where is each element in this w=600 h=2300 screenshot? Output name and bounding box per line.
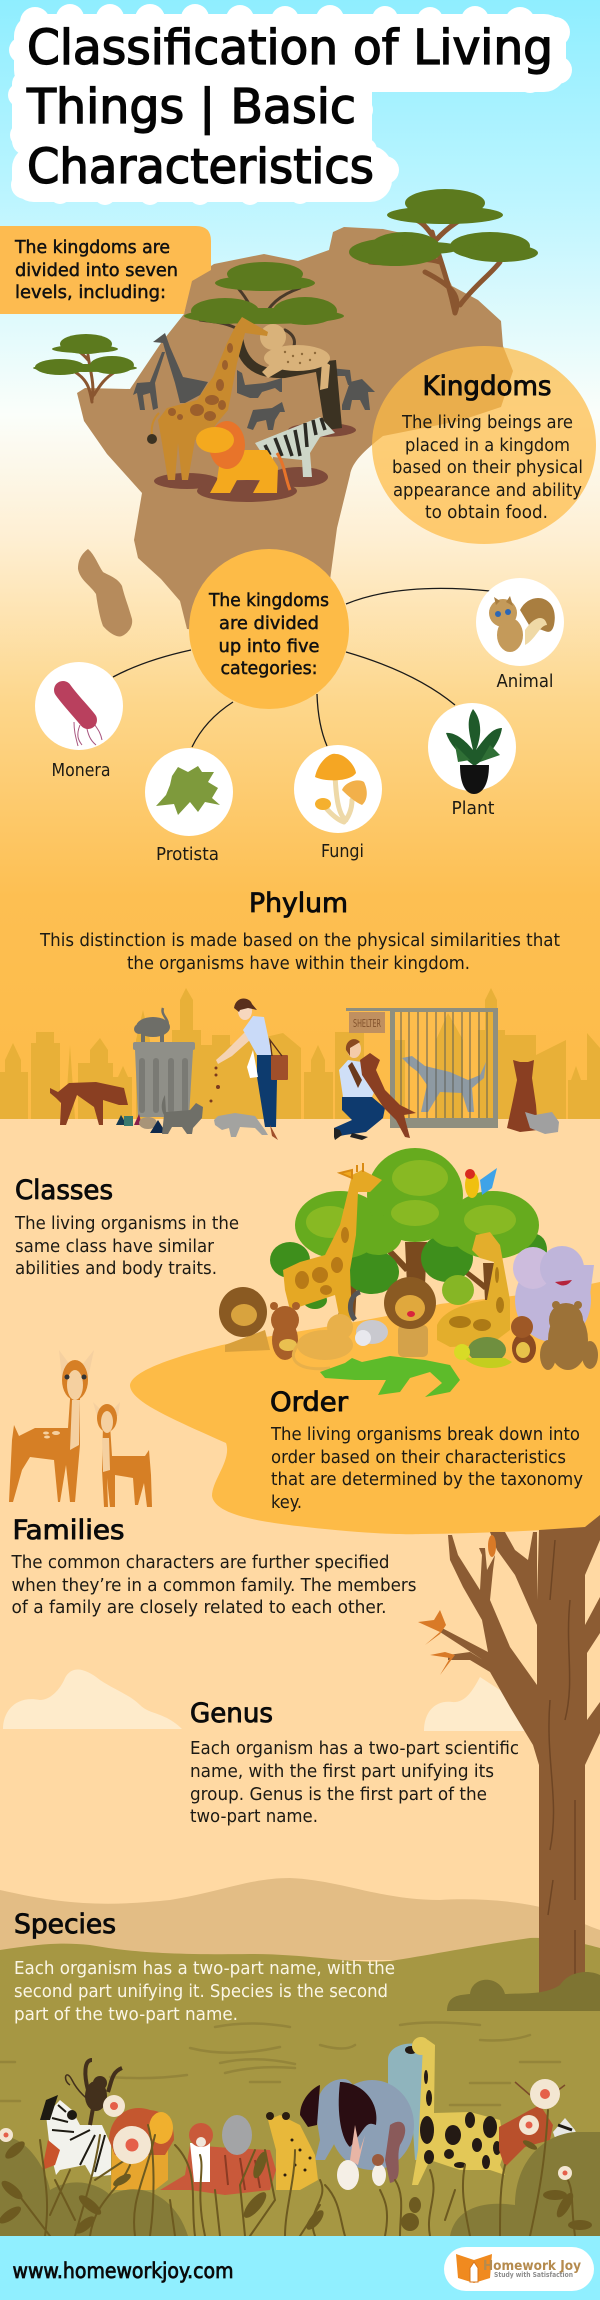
orange leaves: [418, 1535, 496, 1675]
logo: Homework Joy: Homework Joy: [483, 2259, 581, 2274]
background: sky to orange gradient: [0, 0, 600, 1120]
elephant: [513, 1246, 594, 1342]
illustration: man hugging dog: [334, 1039, 416, 1140]
crocodile: [320, 1356, 460, 1397]
rabbit: [337, 2125, 365, 2190]
callout: five categories circle: categories:: [220, 658, 318, 679]
text: Genus description: Each organism has a two-part scientific: [190, 1738, 519, 1759]
text: Kingdoms description: to obtain food.: [425, 502, 548, 523]
monkey: [511, 1316, 536, 1363]
reclining giraffe: [437, 1232, 510, 1347]
category: Protista: Protista: [156, 844, 219, 865]
small brown bear: [270, 1302, 300, 1360]
icon: open book: [456, 2254, 492, 2283]
text: Phylum description: [39, 930, 560, 974]
footer website text: www.homeworkjoy.com: [12, 2259, 234, 2283]
category: Protista: [145, 748, 233, 865]
text: Classes description: same class have similar: [15, 1236, 214, 1257]
title lines: Classification of Living: [27, 20, 553, 76]
footer band: [0, 2236, 600, 2300]
callout: five categories circle: are divided: [219, 613, 319, 634]
deer: [499, 2082, 565, 2167]
text: Order description: [270, 1424, 583, 1513]
foreground bushes: [0, 2132, 600, 2236]
callout: five categories circle: The kingdoms: [208, 590, 329, 611]
text: Kingdoms description: appearance and ability: [393, 480, 582, 501]
category: Animal: [476, 578, 564, 692]
heading: Order: Order: [270, 1387, 348, 1418]
text: Species description: second part unifying it. Species is the second: [14, 1981, 388, 2002]
callout: five categories circle: up into five: [218, 636, 320, 657]
giraffe: [147, 317, 268, 480]
text: Genus description: two-part name.: [190, 1806, 318, 1827]
elephant: [300, 2079, 414, 2183]
text: Classes description: The living organisms in the: [14, 1213, 239, 1234]
heading: Species: Species: [14, 1909, 116, 1940]
heading: Classes: Classes: [15, 1175, 113, 1206]
illustration: sitting dog and kitten: [507, 1060, 559, 1134]
central tree branches: [200, 285, 300, 358]
clouds: [3, 1670, 530, 1731]
category: Animal: Animal: [496, 671, 554, 692]
connector lines: [113, 588, 490, 747]
icon: bacterium: [63, 690, 102, 746]
icon: green protist: [156, 766, 220, 815]
text: Order description: key.: [271, 1492, 302, 1513]
text: Species description: part of the two-part name.: [14, 2004, 238, 2025]
lemur: [350, 1292, 388, 1346]
brown bear: [540, 1301, 598, 1370]
text: Order description: The living organisms break down into: [270, 1424, 580, 1445]
panel: Order background blob: [130, 1282, 600, 1534]
title: [8, 4, 572, 205]
foreground leaves: [0, 2138, 592, 2237]
category: Monera: Monera: [52, 760, 110, 781]
cat on bin: [134, 1008, 170, 1042]
text: Genus description: name, with the first part unifying its: [190, 1761, 494, 1782]
owl: [222, 2115, 252, 2155]
category: Plant: Plant: [452, 798, 494, 819]
category: Fungi: [294, 745, 382, 862]
icon: squirrel: [489, 596, 555, 652]
large deer: [9, 1350, 94, 1502]
text: Order description: order based on their characteristics: [271, 1447, 566, 1468]
illustration: zoo animals and trees: [219, 1148, 598, 1397]
squirrel: [372, 2154, 386, 2186]
callout: seven levels tag: levels, including:: [15, 282, 166, 303]
text: Genus description: group. Genus is the first part of the: [190, 1784, 487, 1805]
maned lion left: [219, 1287, 270, 1352]
text: Kingdoms description: placed in a kingdom: [405, 435, 570, 456]
text: Phylum description: the organisms have within their kingdom.: [127, 953, 470, 974]
hills: [0, 1878, 600, 2240]
small deer: [93, 1402, 152, 1507]
callout: seven levels tag: divided into seven: [15, 260, 178, 281]
centre lion: [384, 1277, 436, 1357]
illustration: shelter sign: [346, 1008, 392, 1033]
callout: five categories circle: [189, 549, 349, 709]
monkey: [66, 2060, 122, 2125]
lioness: [293, 1314, 353, 1369]
text: Species description: [14, 1958, 395, 2025]
heading: Genus: Genus: [190, 1698, 273, 1729]
flowers: [0, 2079, 572, 2180]
turtle: [454, 1337, 512, 1368]
illustration: dog in cage: [390, 1008, 498, 1128]
tiger: [160, 2123, 276, 2195]
illustration: autumn tree: [418, 1515, 600, 1995]
icon: left acacia tree: [33, 334, 137, 402]
logo: Homework Joy: Study with Satisfaction: [494, 2271, 573, 2279]
blue animal neck: [388, 2044, 432, 2160]
zebra: [40, 2095, 111, 2177]
text: Families description: of a family are closely related to each other.: [12, 1597, 386, 1618]
text: Species description: Each organism has a two-part name, with the: [14, 1958, 395, 1979]
silhouette animals: [133, 333, 375, 430]
grass dashes: [0, 2022, 560, 2105]
text: Kingdoms description: [392, 412, 583, 523]
text: Classes description: [14, 1213, 239, 1279]
logo: Homework Joy: [444, 2247, 594, 2291]
bark grooves: [548, 1540, 575, 1985]
lion: [109, 2108, 174, 2190]
grey cat: [162, 1095, 203, 1134]
illustration: left brown dog: [50, 1082, 128, 1125]
bush at tree base: [447, 1972, 600, 2011]
illustration: two deer: [9, 1350, 152, 1507]
foreground plants and stems: [15, 2110, 575, 2236]
category: Fungi: Fungi: [321, 841, 364, 862]
cage: [390, 1008, 498, 1128]
title cloud backdrop: [8, 4, 572, 205]
lion: [196, 421, 290, 493]
icon: mushrooms: [315, 754, 367, 822]
heading: Kingdoms: Kingdoms: [422, 371, 552, 402]
icon: top right acacia tree: [349, 189, 538, 313]
giraffe: [405, 2037, 505, 2185]
trash can: [133, 1042, 195, 1117]
title: Things | Basic: [26, 79, 356, 135]
spilled trash: [116, 1114, 166, 1133]
panel: Kingdoms: [372, 346, 596, 544]
title: Characteristics: [27, 139, 374, 195]
illustration: woman feeding animals: [210, 998, 288, 1140]
text: Families description: when they’re in a common family. The members: [12, 1575, 416, 1596]
heading: Phylum: Phylum: [249, 888, 348, 919]
leopard: [260, 324, 330, 390]
map of Africa: [77, 227, 513, 640]
text: Kingdoms description: based on their physical: [392, 457, 583, 478]
heading: Families: Families: [12, 1515, 125, 1546]
central tree canopy: [184, 262, 344, 325]
illustration: city skyline: [0, 988, 600, 1119]
illustration: trash can and cats: [116, 1008, 268, 1137]
parrot: [465, 1168, 497, 1198]
zebra: [255, 417, 335, 477]
text: Order description: that are determined by the taxonomy: [271, 1469, 583, 1490]
illustration: shelter sign: SHELTER: [353, 1017, 381, 1030]
text: Phylum description: This distinction is made based on the physical similarities that: [39, 930, 560, 951]
text: Genus description: [190, 1738, 519, 1827]
category: Monera: [35, 662, 123, 781]
text: Families description: [10, 1552, 417, 1618]
cheetah: [266, 2112, 318, 2190]
callout: seven levels tag: [0, 226, 211, 314]
illustration: safari animals: [40, 2037, 578, 2195]
callout: seven levels tag: The kingdoms are: [14, 237, 170, 258]
ground shadows: [154, 423, 356, 502]
illustration: savanna animals on the map: [133, 262, 375, 502]
icon: potted plant: [446, 709, 502, 794]
text: Classes description: abilities and body traits.: [15, 1258, 217, 1279]
text: Kingdoms description: The living beings are: [401, 412, 573, 433]
text: Families description: The common characters are further specified: [10, 1552, 389, 1573]
Madagascar island: [78, 549, 132, 637]
trees: [270, 1148, 547, 1320]
light grey cat: [214, 1113, 268, 1137]
tall giraffe: [283, 1163, 382, 1320]
category: Plant: [428, 703, 516, 819]
raccoon: [553, 2118, 578, 2138]
dark tree trunk: [234, 337, 342, 430]
background: peach lower section: [0, 1119, 600, 1919]
